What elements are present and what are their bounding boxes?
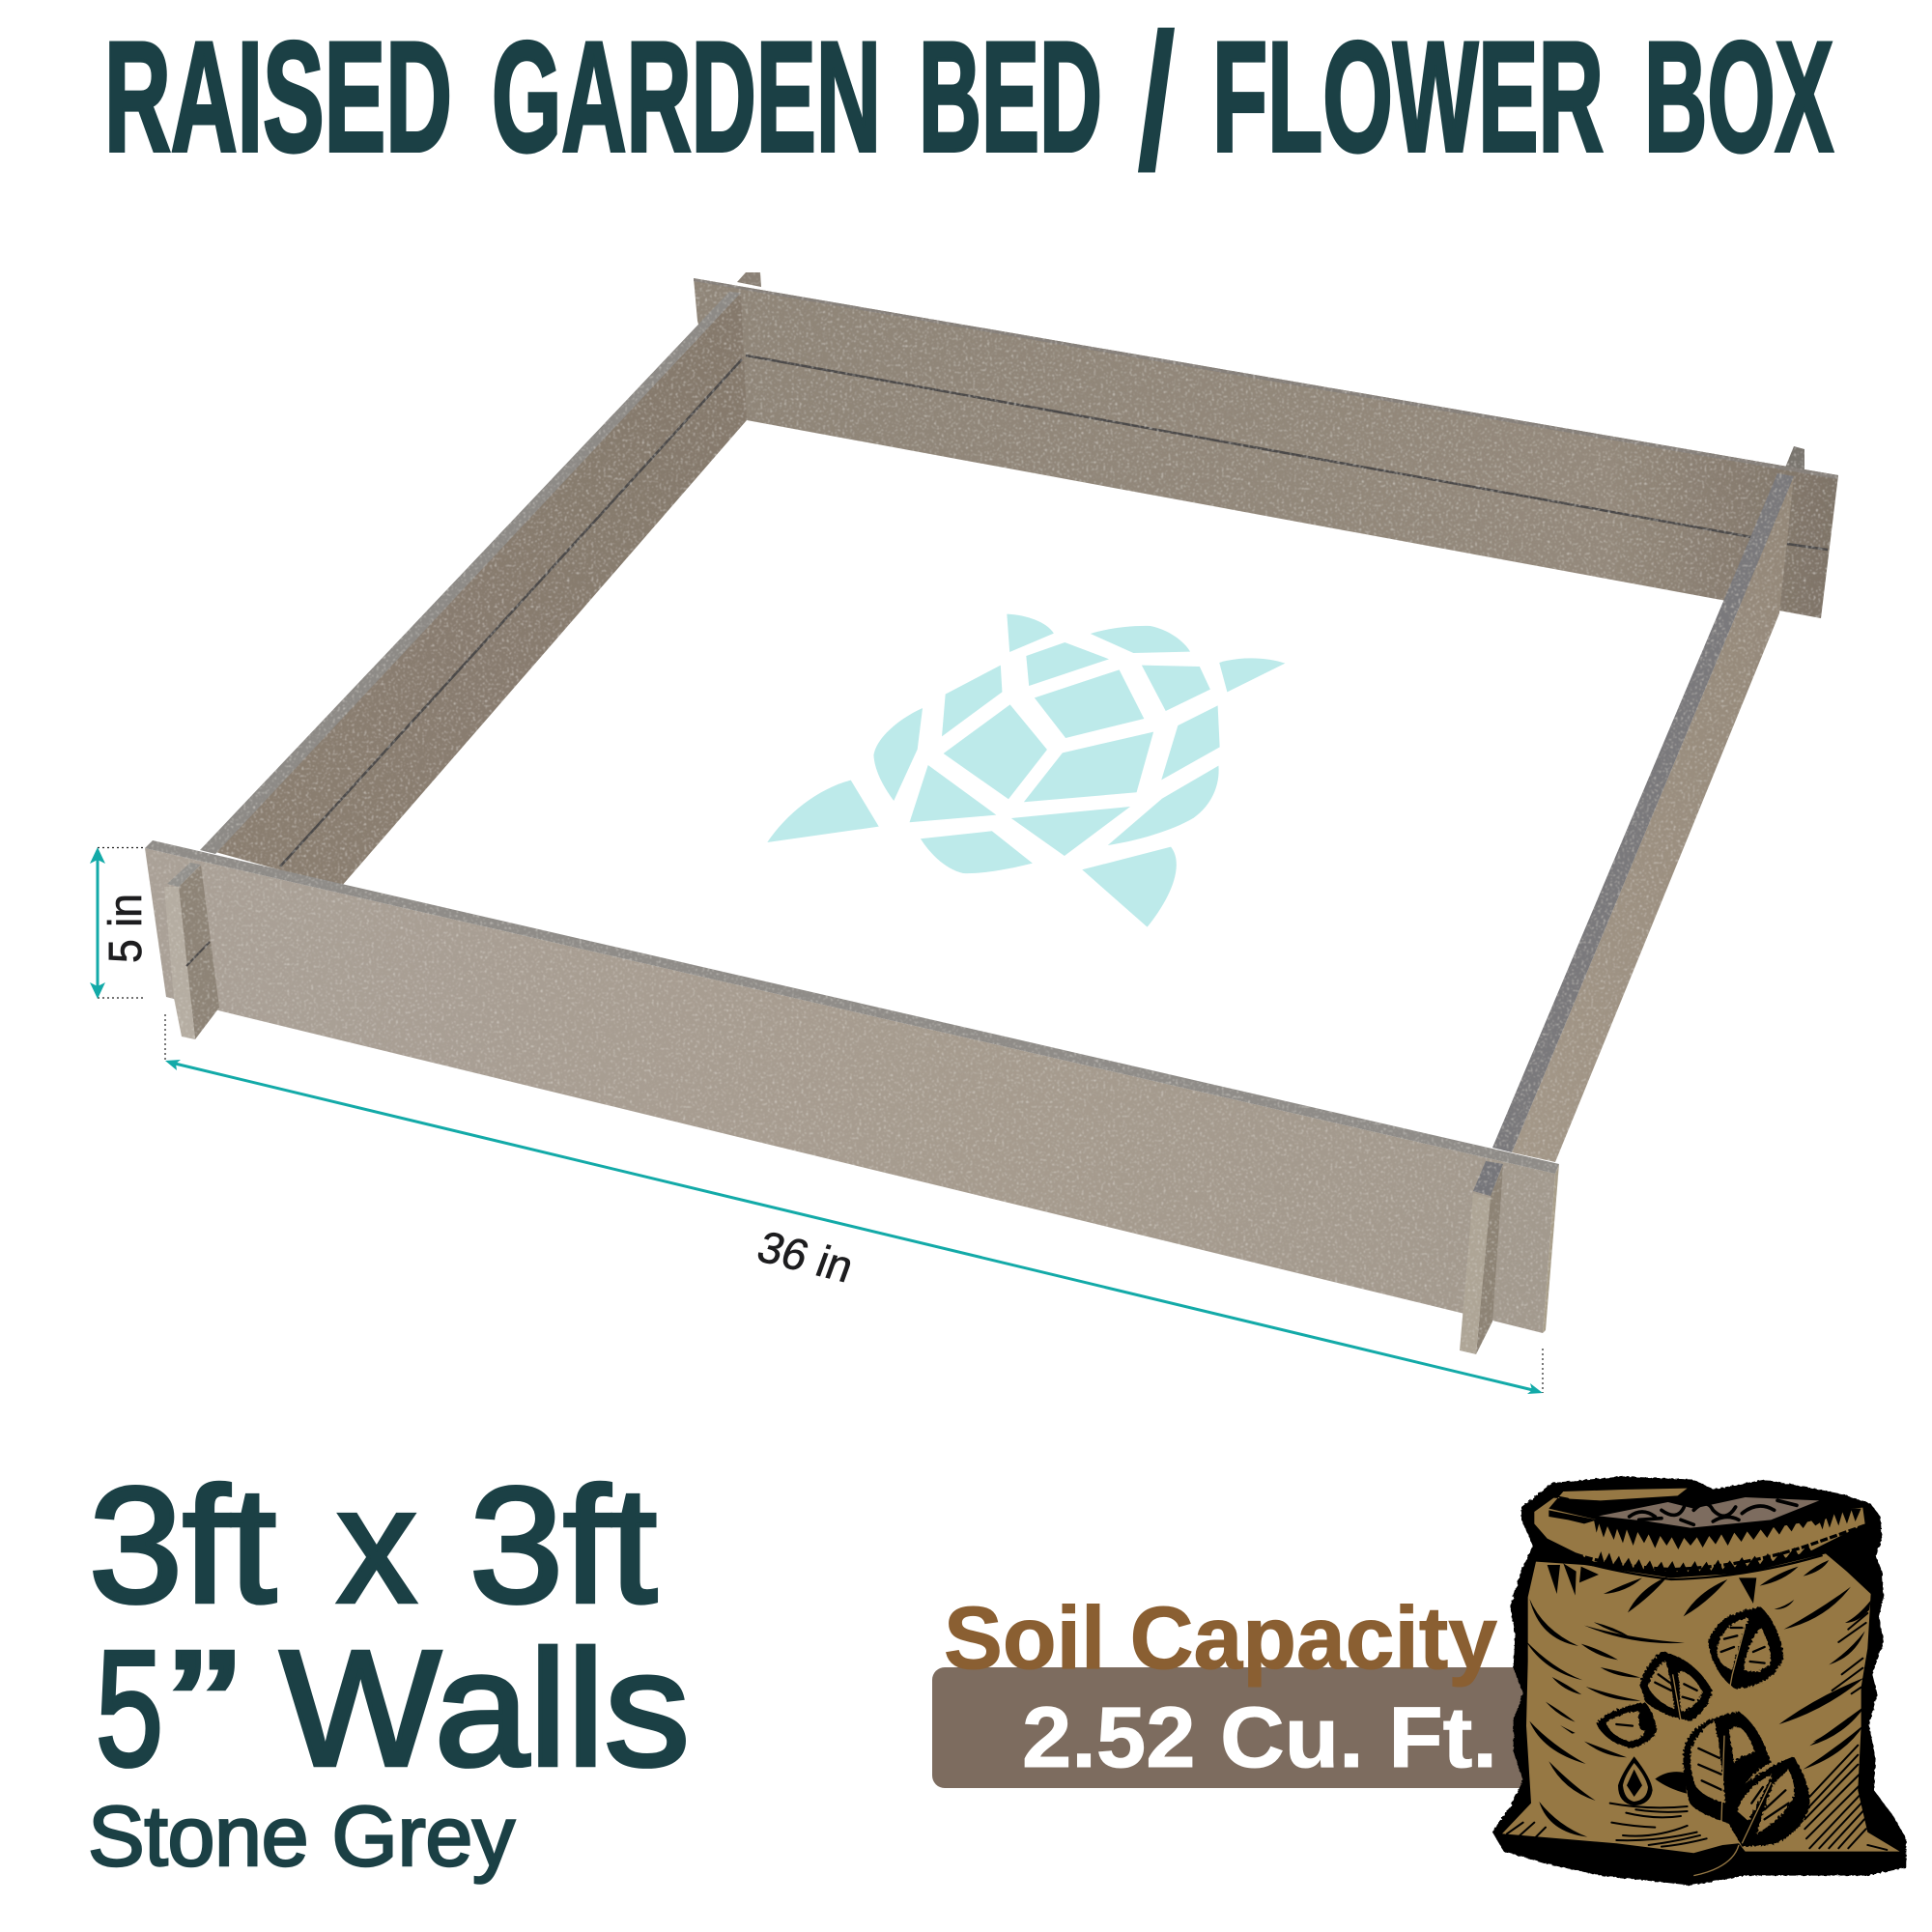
fine hatching [1507, 1613, 1887, 1850]
leaf veins [1616, 1628, 1789, 1819]
front-left corner post [164, 863, 219, 1039]
rim seam [1536, 1525, 1864, 1579]
title: FLOWER [1212, 10, 1604, 185]
title [104, 0, 1833, 210]
size heading: 5 inch walls: ” [170, 1617, 240, 1801]
soil [1599, 1497, 1819, 1528]
size heading: 5 inch walls: Walls [280, 1617, 690, 1801]
raised garden bed photo [145, 272, 1838, 1354]
size heading: 3ft x 3ft: 3ft [89, 1454, 276, 1637]
soil clods [1630, 1500, 1797, 1524]
leaves [1597, 1607, 1810, 1847]
back wall [694, 272, 1838, 618]
icon: soil sack [1492, 1476, 1906, 1886]
sack body [1502, 1553, 1900, 1853]
soil capacity bar [932, 1667, 1550, 1788]
size heading: 3ft x 3ft: x [337, 1454, 416, 1637]
front-right corner post [1460, 1161, 1503, 1354]
rim hatching [1594, 1504, 1838, 1549]
height dimension: 5 in: 5 in [100, 894, 152, 963]
size heading: 3ft x 3ft: 3ft [469, 1454, 657, 1637]
title: BED [919, 10, 1102, 185]
icon: turtle logo [767, 614, 1285, 927]
stems [1655, 1626, 1771, 1876]
title: / [1137, 0, 1176, 210]
size heading: 3ft x 3ft [89, 1454, 657, 1637]
sack silhouette [1492, 1476, 1906, 1886]
soil capacity heading: Soil Capacity [944, 1589, 1497, 1688]
left wall [200, 292, 747, 887]
water drop [1618, 1756, 1653, 1805]
title: GARDEN [492, 10, 881, 185]
wrinkles [1525, 1560, 1871, 1837]
front wall [145, 840, 1559, 1333]
size heading: 5 inch walls [96, 1617, 690, 1801]
sack rim [1534, 1489, 1865, 1574]
height dimension: 5 in [90, 847, 152, 999]
title: RAISED [104, 10, 452, 185]
right wall [1492, 473, 1794, 1162]
colour label: Stone Grey [88, 1788, 515, 1884]
size heading: 5 inch walls: 5 [96, 1617, 163, 1801]
soil capacity value: 2.52 Cu. Ft. [1022, 1689, 1497, 1785]
width dimension: 36 in [165, 1014, 1543, 1394]
width dimension: 36 in: 36 in [752, 1221, 860, 1292]
